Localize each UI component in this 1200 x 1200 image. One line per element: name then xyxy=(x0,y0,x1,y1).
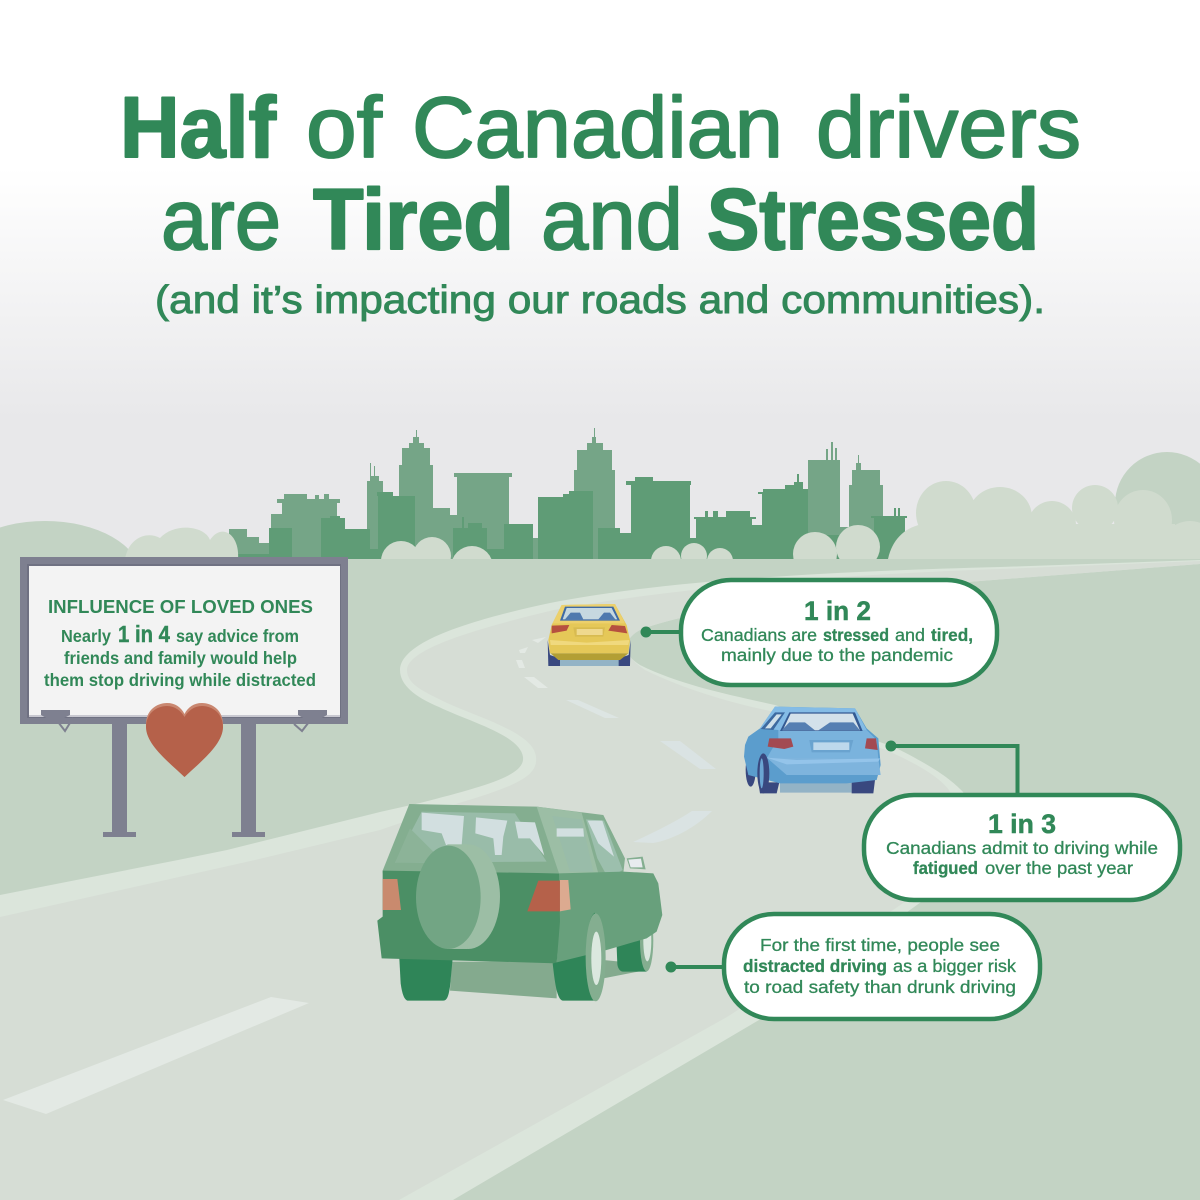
statistic: 1 in 3 xyxy=(988,809,1056,839)
title line 2: are xyxy=(161,172,281,268)
callout box xyxy=(864,795,1180,900)
title line 1: of xyxy=(306,80,383,176)
callout: distracted driving xyxy=(666,914,1040,1019)
description xyxy=(701,625,973,665)
description: mainly due to the pandemic xyxy=(721,645,953,665)
description: Canadians admit to driving while xyxy=(886,838,1158,858)
billboard body text: 1 in 4 xyxy=(118,621,170,647)
description: distracted driving xyxy=(743,956,887,976)
callout box xyxy=(724,914,1040,1019)
billboard body text xyxy=(44,621,316,690)
road surface xyxy=(0,561,1200,1200)
title line 2: Stressed xyxy=(707,172,1039,268)
sky background xyxy=(0,0,1200,560)
front buildings xyxy=(229,474,907,559)
description: fatigued xyxy=(913,858,978,878)
billboard xyxy=(20,557,348,837)
description xyxy=(886,838,1158,878)
title line 1: Canadian xyxy=(412,80,783,176)
yellow car xyxy=(548,604,631,666)
title line 1 xyxy=(120,80,1081,176)
connector xyxy=(886,740,1018,795)
description xyxy=(743,935,1016,997)
distant hills xyxy=(0,452,1200,629)
city skyline xyxy=(229,428,907,559)
description: over the past year xyxy=(985,858,1133,878)
billboard frame xyxy=(20,557,348,724)
description: stressed xyxy=(823,625,889,645)
title line 1: drivers xyxy=(816,80,1081,176)
description: tired, xyxy=(931,625,973,645)
statistic: 1 in 2 xyxy=(804,596,871,626)
title line 2: and xyxy=(541,172,683,268)
billboard body text: say advice from xyxy=(176,626,299,646)
billboard lamps xyxy=(41,710,327,731)
road xyxy=(0,560,1200,1200)
back buildings xyxy=(229,428,883,559)
connector xyxy=(640,626,682,638)
description: Canadians are xyxy=(701,625,817,645)
description: and xyxy=(895,625,925,645)
bushes xyxy=(125,481,1200,588)
billboard body text: them stop driving while distracted xyxy=(44,670,316,690)
billboard panel xyxy=(29,566,340,716)
callout box xyxy=(681,580,997,685)
billboard body text: friends and family would help xyxy=(64,648,297,668)
description: as a bigger risk xyxy=(893,956,1016,976)
icon: heart xyxy=(146,703,223,777)
road centre dashes xyxy=(3,637,716,1114)
connector xyxy=(666,962,725,972)
road shoulder xyxy=(0,560,1200,1200)
callout: 1 in 2 xyxy=(640,580,997,685)
title xyxy=(120,80,1081,322)
green SUV xyxy=(377,804,662,1001)
billboard posts xyxy=(103,724,265,837)
title line 2 xyxy=(161,172,1039,268)
billboard body text: Nearly xyxy=(61,626,111,646)
grass ground xyxy=(0,559,1200,1200)
subtitle: (and it’s impacting our roads and communities). xyxy=(155,279,1045,322)
description: to road safety than drunk driving xyxy=(744,977,1016,997)
description: For the first time, people see xyxy=(760,935,1000,955)
billboard heading: INFLUENCE OF LOVED ONES xyxy=(48,597,313,617)
callout: 1 in 3 xyxy=(864,740,1180,900)
blue car xyxy=(744,707,881,793)
title line 1: Half xyxy=(120,80,276,176)
title line 2: Tired xyxy=(313,172,514,268)
